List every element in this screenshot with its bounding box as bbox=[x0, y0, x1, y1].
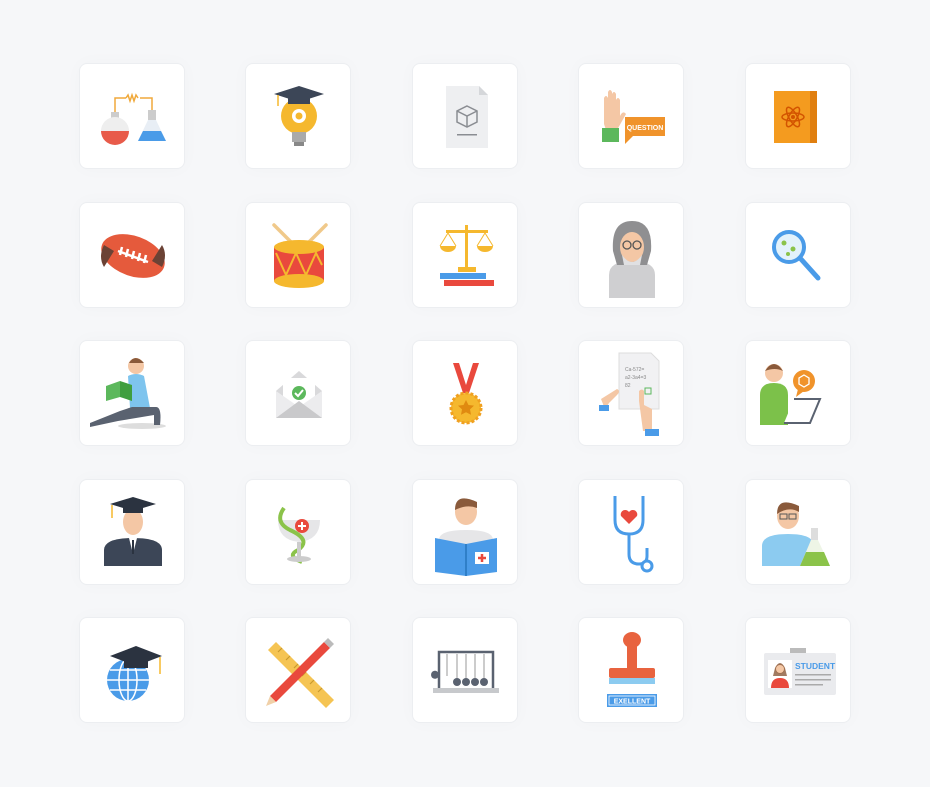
tile: exam paper: Ca-572= bbox=[625, 367, 644, 373]
tile: scales on books bbox=[412, 202, 518, 308]
tile: hand with question bbox=[578, 63, 684, 169]
tile: exam paper bbox=[578, 340, 684, 446]
tile: stethoscope bbox=[578, 479, 684, 585]
tile: exam paper: a2-3a4=3 bbox=[625, 375, 646, 381]
tile: man with medical book bbox=[412, 479, 518, 585]
tile: football bbox=[79, 202, 185, 308]
tile: medal bbox=[412, 340, 518, 446]
tile: graduate bbox=[79, 479, 185, 585]
tile: man with laptop bbox=[745, 340, 851, 446]
tile: scientist with flask bbox=[745, 479, 851, 585]
tile: excellent stamp bbox=[578, 617, 684, 723]
tile: science book bbox=[745, 63, 851, 169]
tile: excellent stamp: EXELLENT bbox=[614, 698, 651, 706]
tile: globe with cap bbox=[79, 617, 185, 723]
tile: chemistry flasks bbox=[79, 63, 185, 169]
tile: reading person bbox=[79, 340, 185, 446]
tile: document with cube bbox=[412, 63, 518, 169]
tile: idea lightbulb with cap bbox=[245, 63, 351, 169]
tile: student ID card: STUDENT bbox=[795, 661, 836, 671]
tile: hand with question: QUESTION bbox=[627, 125, 663, 132]
tile: pharmacy cup bbox=[245, 479, 351, 585]
tile: old professor bbox=[578, 202, 684, 308]
tile: ruler and pencil bbox=[245, 617, 351, 723]
tile: envelope with check bbox=[245, 340, 351, 446]
tile: drum bbox=[245, 202, 351, 308]
tile: exam paper: 82 bbox=[625, 383, 631, 389]
tile: newton's cradle bbox=[412, 617, 518, 723]
tile: magnifier bbox=[745, 202, 851, 308]
tile: student ID card bbox=[745, 617, 851, 723]
